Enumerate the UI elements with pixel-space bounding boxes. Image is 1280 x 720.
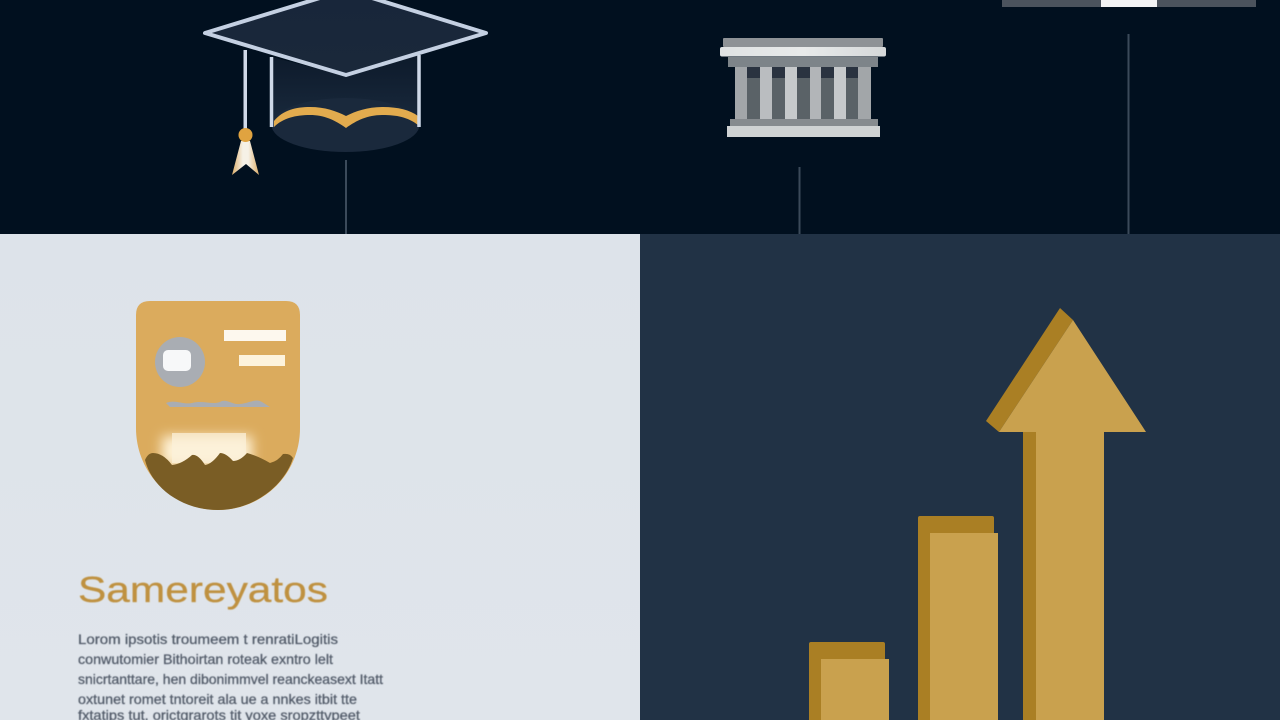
connector line under cap: [345, 160, 347, 234]
bar grey: [1002, 0, 1256, 7]
badge shape: [136, 301, 300, 510]
badge line two: [239, 355, 285, 366]
cap gold band: [274, 107, 418, 128]
columns: [735, 67, 871, 119]
icon: classical building: [720, 38, 886, 137]
bar highlight: [1101, 0, 1157, 7]
body text: Lorom ipsotis troumeem t renratiLogitis: [78, 631, 338, 647]
icon: gold shield badge: [136, 301, 300, 510]
badge glow core: [172, 433, 246, 463]
badge avatar circle: [155, 337, 205, 387]
body text: [78, 631, 383, 720]
roof white slab: [720, 47, 886, 56]
interior: [735, 67, 871, 119]
roof top slab: [723, 38, 883, 47]
bar 2: [918, 516, 998, 720]
connector line under building: [798, 167, 800, 234]
body text: conwutomier Bithoirtan roteak exntro lelt: [78, 651, 333, 667]
icon: graduation cap: [205, 0, 486, 175]
heading: Samereyatos: [78, 569, 328, 610]
panel: left light panel: [0, 234, 640, 720]
cap brim ellipse: [272, 98, 420, 152]
badge brown base: [145, 453, 293, 510]
base lower: [727, 126, 880, 137]
tassel cord: [244, 50, 247, 130]
badge wavy line: [166, 400, 270, 407]
interior shadow: [735, 67, 871, 78]
panel: right navy panel: [640, 234, 1280, 720]
panel: top dark band: [0, 0, 1280, 234]
body text: snicrtanttare, hen dibonimmvel reanckeasext Itatt: [78, 671, 383, 687]
badge line one: [224, 330, 286, 341]
tassel: [232, 141, 259, 175]
base upper: [730, 119, 878, 126]
badge glow: [162, 436, 252, 466]
cap body: [272, 55, 419, 127]
arrow: [986, 308, 1146, 720]
bar 1: [809, 642, 889, 720]
entablature: [728, 57, 878, 67]
chart: rising bars with arrow: [809, 308, 1146, 720]
cap side lines: [272, 55, 419, 127]
connector line right: [1128, 34, 1130, 234]
badge avatar highlight: [163, 350, 191, 371]
cap mortarboard: [205, 0, 486, 75]
top-right cropped bar: [1002, 0, 1256, 7]
tassel knob: [238, 128, 252, 142]
body text: oxtunet romet tntoreit ala ue a nnkes itbit tte: [78, 691, 357, 707]
